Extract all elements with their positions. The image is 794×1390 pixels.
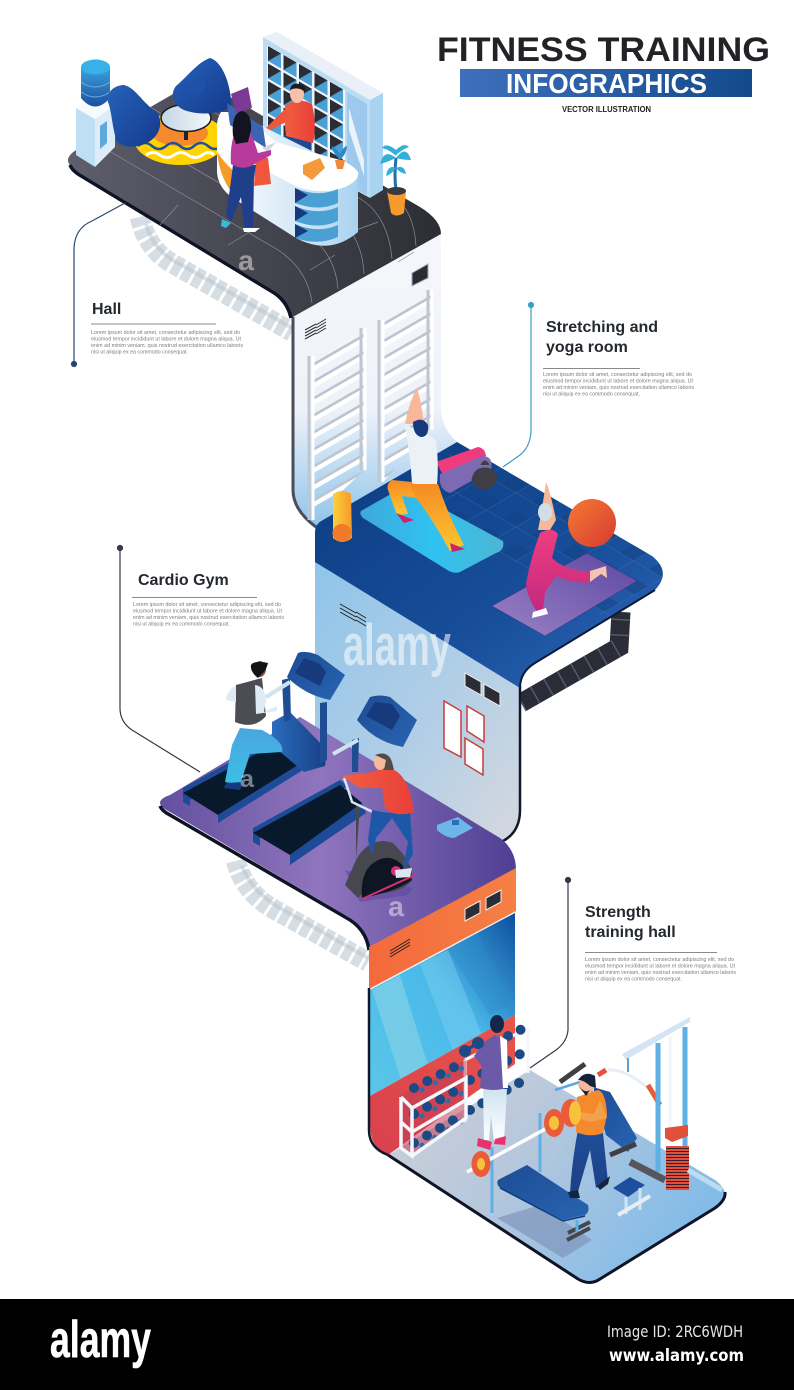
callout: strength training hall: training hall: [585, 924, 676, 941]
shelf unit: [263, 32, 383, 198]
beanbag chairs: [108, 58, 231, 147]
man on treadmill: [224, 661, 282, 790]
woman in yoga pose: [526, 482, 607, 618]
callout: strength training hall: nisi ut aliquip ex ea commodo consequat.: [585, 976, 682, 982]
callout: cardio gym: [132, 572, 284, 628]
reception desk: [217, 103, 358, 246]
footer bar: [0, 1299, 794, 1390]
incline bench: [555, 1064, 637, 1155]
ribbed pipe under cardio gym: [235, 858, 368, 962]
leader line: strength training hall: [530, 878, 570, 1068]
treadmill one: [183, 652, 345, 823]
callout: cardio gym: Cardio Gym: [138, 572, 229, 589]
plant: [380, 145, 411, 216]
ribbed pipe under hall: [139, 214, 292, 332]
cardio floor: [160, 717, 516, 950]
man in yoga pose: [388, 388, 465, 552]
callout: hall: nisi ut aliquip ex ea commodo consequat.: [91, 350, 188, 356]
footer bar: Image ID: 2RC6WDH: [607, 1322, 743, 1341]
header title: VECTOR ILLUSTRATION: [562, 105, 651, 114]
rolled mats: [436, 447, 486, 475]
callout: stretching and yoga room: eiusmod tempor incididunt ut labore et dolore magna aliqua. Ut: [543, 378, 694, 384]
leader line: cardio gym: [118, 546, 200, 772]
desk shelves: [295, 188, 338, 242]
customer woman: [221, 111, 271, 232]
watermarks: a: [238, 245, 254, 276]
yoga room side wall: [315, 560, 520, 841]
callout: hall: [91, 301, 243, 356]
callout: hall: Hall: [92, 301, 121, 318]
wall with climbing ladders: [292, 233, 462, 528]
callout: hall: Lorem ipsum dolor sit amet, consectetur adipiscing elit, sed do: [91, 330, 240, 336]
callout: stretching and yoga room: [543, 319, 694, 398]
barbell and squat rack: [467, 1099, 581, 1213]
callout: cardio gym: Lorem ipsum dolor sit amet, consectetur adipiscing elit, sed do: [133, 602, 281, 608]
callout: cardio gym: eiusmod tempor incididunt ut labore et dolore magna aliqua. Ut: [133, 608, 283, 614]
water cooler: [76, 60, 115, 167]
callout: strength training hall: [585, 904, 736, 982]
shopping bags: [231, 87, 271, 186]
callout: strength training hall: Lorem ipsum dolor sit amet, consectetur adipiscing elit, sed do: [585, 957, 734, 963]
dumbbell racks: [400, 1026, 528, 1156]
callout: stretching and yoga room: Lorem ipsum dolor sit amet, consectetur adipiscing elit, sed do: [543, 372, 692, 378]
reception staff man: [266, 84, 315, 160]
leader line: stretching and yoga room: [503, 302, 534, 467]
callout: stretching and yoga room: enim ad minim veniam, quis nostrud exercitation ullamco laboris: [543, 385, 694, 391]
watermarks: a: [240, 766, 255, 793]
strength hall orange band: [369, 868, 516, 990]
header title: INFOGRAPHICS: [506, 68, 707, 99]
leader line: hall: [72, 203, 125, 366]
callout: stretching and yoga room: yoga room: [546, 339, 628, 356]
man lifting barbell: [568, 1074, 610, 1198]
callout: hall: enim ad minim veniam, quis nostrud exercitation ullamco laboris: [91, 343, 243, 349]
man with dumbbell: [459, 1015, 508, 1150]
footer bar: www.alamy.com: [609, 1346, 744, 1366]
front rack: [400, 1060, 466, 1155]
yoga room floor: [315, 442, 663, 688]
callout: strength training hall: enim ad minim veniam, quis nostrud exercitation ullamco laboris: [585, 970, 736, 976]
ladders: [309, 290, 432, 520]
callout: strength training hall: eiusmod tempor incididunt ut labore et dolore magna aliqua. Ut: [585, 964, 736, 970]
carpet and coffee table: [134, 104, 226, 165]
header title: FITNESS TRAINING: [437, 31, 770, 69]
watermarks: alamy: [343, 613, 451, 678]
back rack: [465, 1028, 528, 1122]
flat bench: [497, 1165, 590, 1240]
strength hall mirror wall: [369, 913, 515, 1155]
kettlebell: [472, 461, 497, 489]
dark pipe under yoga room: [521, 612, 621, 703]
vent: [305, 319, 326, 339]
hall floor: [68, 79, 441, 318]
header title: [437, 31, 770, 114]
cable machine: [608, 1017, 722, 1215]
callout: stretching and yoga room: Stretching and: [546, 319, 658, 336]
callout: cardio gym: enim ad minim veniam, quis nostrud exercitation ullamco laboris: [133, 615, 284, 621]
hatch: [412, 264, 428, 286]
woman on exercise bike: [342, 754, 415, 902]
footer bar: alamy: [50, 1311, 151, 1369]
watermarks: [238, 245, 451, 922]
mat: blue: [360, 487, 503, 573]
strength hall floor: [388, 1070, 725, 1282]
callout: hall: eiusmod tempor incididunt ut labore et dolore magna aliqua. Ut: [91, 336, 242, 342]
watermarks: a: [388, 891, 404, 922]
treadmill two: [253, 696, 417, 865]
callout: stretching and yoga room: nisi ut aliquip ex ea commodo consequat.: [543, 392, 640, 398]
callout: cardio gym: nisi ut aliquip ex ea commodo consequat.: [133, 622, 230, 628]
callout: strength training hall: Strength: [585, 904, 651, 921]
scales: [437, 817, 473, 838]
gym ball: [568, 499, 616, 547]
mat: purple: [492, 553, 637, 636]
